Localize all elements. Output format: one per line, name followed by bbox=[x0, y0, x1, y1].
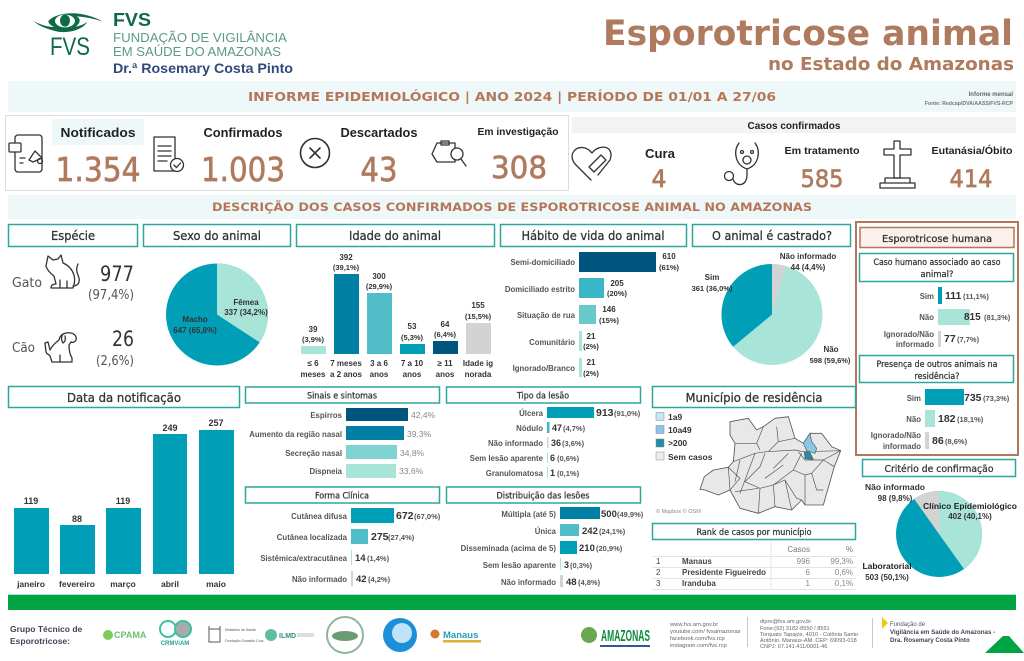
bar chart: tipo: Sem lesão aparente bbox=[470, 454, 544, 463]
bar chart: tipo: Granulomatosa bbox=[486, 469, 544, 478]
panel: totais de casos: Confirmados bbox=[204, 125, 282, 140]
bar chart: hábito: (61%) bbox=[659, 263, 680, 272]
footer: contatos: CNPJ: 07.141.411/0001-46 bbox=[760, 644, 827, 650]
title bbox=[603, 14, 1014, 75]
table: rank: Iranduba bbox=[682, 579, 716, 588]
bar chart: distribuição: (4,8%) bbox=[578, 578, 601, 587]
bar chart: distribuição: 500 bbox=[601, 509, 617, 520]
pie chart: critério: 402 (40,1%) bbox=[948, 512, 992, 521]
bar chart: forma: 275 bbox=[371, 531, 389, 543]
logo: Amazonas: AMAZONAS bbox=[601, 628, 650, 645]
bar chart: tipo: (91,0%) bbox=[614, 409, 641, 418]
bar chart: hábito: 610 bbox=[662, 252, 676, 261]
bar chart: forma: 42 bbox=[356, 574, 367, 585]
logo: Prefeitura de Manaus: Manaus bbox=[443, 630, 478, 641]
logo: FVS: FVS bbox=[50, 33, 90, 61]
bar chart: outros animais: (8,6%) bbox=[945, 437, 968, 446]
bar chart: forma: 14 bbox=[355, 553, 366, 564]
pie chart: sexo: 337 (34,2%) bbox=[224, 308, 268, 317]
panel: casos confirmados: Cura bbox=[645, 146, 676, 161]
legend: mapa: Sem casos bbox=[668, 452, 713, 462]
title: Esporotricose animal bbox=[603, 14, 1013, 54]
panel: idade do animal: Idade do animal bbox=[349, 228, 441, 243]
bar chart: hábito bbox=[505, 252, 680, 378]
panel: data da notificação: Data da notificação bbox=[67, 390, 181, 405]
bar chart: hábito: 21 bbox=[587, 332, 596, 341]
bar chart: tipo: 36 bbox=[551, 438, 561, 448]
bar chart: outros animais: Sim bbox=[907, 394, 921, 403]
band: informe epidemiológico: Fonte: Redcap/DVA/AASS/FVS-RCP bbox=[925, 101, 1014, 107]
table: rank: 3 bbox=[656, 579, 661, 588]
bar chart: hábito: 146 bbox=[602, 305, 616, 314]
icon: gato bbox=[46, 255, 79, 288]
bar chart: caso humano associado: 77 bbox=[944, 333, 956, 345]
table: rank: 0,1% bbox=[835, 579, 853, 588]
icon: eye bbox=[33, 13, 103, 32]
bar chart: forma bbox=[260, 508, 441, 586]
panel: forma clínica: Forma Clínica bbox=[315, 492, 369, 502]
bar chart: tipo: 47 bbox=[552, 423, 562, 433]
panel: castrado bbox=[692, 224, 851, 365]
bar chart: tipo: 1 bbox=[550, 468, 555, 478]
table: rank: 99,3% bbox=[830, 557, 853, 566]
panel: casos confirmados: Eutanásia/Óbito bbox=[932, 144, 1012, 157]
pie chart: critério: Não informado bbox=[865, 482, 925, 492]
panel: esporotricose humana: Caso humano associado ao caso bbox=[874, 258, 1000, 268]
bar chart: hábito: (20%) bbox=[607, 289, 628, 298]
logo: FVS: Dr.ª Rosemary Costa Pinto bbox=[113, 60, 293, 76]
bar chart: sinais: 33,6% bbox=[399, 466, 424, 476]
panel: totais de casos: Descartados bbox=[340, 125, 418, 140]
bar chart: notificações por mês: 257 bbox=[208, 418, 224, 428]
bar chart: sinais: Secreção nasal bbox=[285, 449, 342, 458]
bar chart: distribuição: Disseminada (acima de 5) bbox=[461, 544, 556, 553]
logo: selo circular bbox=[327, 617, 363, 653]
footer: contatos: Fone:(92) 3182-8550 / 8551 bbox=[760, 626, 830, 632]
panel: hábito de vida bbox=[500, 224, 686, 378]
bar chart: tipo: Úlcera bbox=[519, 409, 544, 418]
bar chart: distribuição: 210 bbox=[579, 543, 595, 554]
bar chart: idade: (29,9%) bbox=[366, 282, 393, 291]
bar chart: hábito: Situação de rua bbox=[517, 311, 576, 320]
panel: município de residência: Município de residência bbox=[686, 390, 822, 405]
panel: castrado: O animal é castrado? bbox=[712, 228, 832, 243]
panel: espécie: 977 bbox=[100, 262, 134, 286]
panel: esporotricose humana: Presença de outros animais na bbox=[876, 360, 998, 370]
panel: sinais e sintomas bbox=[246, 387, 440, 478]
panel: espécie: Cão bbox=[12, 341, 35, 356]
bar chart: forma: (1,4%) bbox=[367, 554, 390, 563]
panel: rank de casos bbox=[652, 524, 856, 590]
panel: espécie: 26 bbox=[112, 327, 134, 351]
bar chart: caso humano associado: (81,3%) bbox=[984, 313, 1011, 322]
panel: critério de confirmação bbox=[862, 460, 1017, 582]
bar chart: idade: anos bbox=[370, 370, 389, 379]
footer: contatos: dipre@fvs.am.gov.br bbox=[760, 619, 811, 625]
table: rank: 2 bbox=[656, 568, 661, 577]
panel: sexo do animal bbox=[144, 224, 290, 366]
panel: forma clínica bbox=[246, 487, 441, 586]
bar chart: tipo: (3,6%) bbox=[562, 439, 585, 448]
logo: CRMV: CRMViAM bbox=[161, 641, 189, 647]
logo: FVS: EM SAÚDE DO AMAZONAS bbox=[113, 44, 281, 59]
bar chart: sinais: Dispneia bbox=[310, 467, 343, 476]
bar chart: distribuição: 242 bbox=[582, 526, 598, 537]
panel: totais de casos: 308 bbox=[491, 151, 547, 186]
bar chart: idade: ≤ 6 bbox=[307, 359, 319, 368]
band: descrição dos casos bbox=[8, 195, 1016, 219]
footer: contatos: youtube.com/ fvsamazonas bbox=[670, 629, 741, 635]
bar chart: idade: Idade ig bbox=[463, 359, 493, 368]
panel: espécie: Espécie bbox=[51, 228, 95, 243]
logo: Ministério da Saúde bbox=[209, 626, 264, 643]
bar chart: notificações por mês bbox=[14, 418, 234, 589]
bar chart: caso humano associado: Sim bbox=[920, 292, 934, 301]
footer: contatos: instagram.com/fvs.rcp bbox=[670, 643, 727, 649]
bar chart: forma: Não informado bbox=[292, 575, 347, 584]
panel: município de residência: © Mapbox © OSM bbox=[656, 508, 701, 515]
bar chart: sinais: 39,3% bbox=[407, 429, 432, 439]
panel: espécie: (97,4%) bbox=[88, 287, 134, 303]
bar chart: sinais: 34,8% bbox=[400, 448, 425, 458]
bar chart: idade: 7 meses bbox=[330, 359, 362, 368]
table: rank: 1 bbox=[806, 579, 811, 588]
pie chart: castrado: Não bbox=[823, 345, 839, 354]
icon: cão bbox=[45, 333, 76, 362]
panel: município de residência bbox=[652, 386, 856, 515]
pie chart: sexo bbox=[166, 264, 268, 366]
bar chart: idade: ≥ 11 bbox=[437, 359, 453, 368]
bar chart: idade: norada bbox=[465, 370, 492, 379]
footer: fundação bbox=[882, 617, 1024, 653]
footer: contatos bbox=[669, 617, 873, 650]
bar chart: caso humano associado: Ignorado/Não bbox=[884, 330, 934, 339]
table: rank: 6 bbox=[806, 568, 811, 577]
bar chart: idade bbox=[301, 253, 493, 379]
table: rank: Manaus bbox=[682, 557, 712, 566]
panel: casos confirmados: Casos confirmados bbox=[748, 120, 841, 132]
bar chart: idade: (3,9%) bbox=[302, 335, 325, 344]
icon: notificação bbox=[9, 135, 42, 172]
bar chart: hábito: Semi-domiciliado bbox=[510, 258, 575, 267]
panel: distribuição das lesões bbox=[446, 487, 644, 588]
table: rank bbox=[652, 542, 856, 590]
title: no Estado do Amazonas bbox=[768, 55, 1014, 75]
footer: contatos: www.fvs.am.gov.br bbox=[669, 622, 718, 628]
bar chart: idade: 3 a 6 bbox=[370, 359, 388, 368]
bar chart: idade: 300 bbox=[372, 272, 386, 281]
bar chart: distribuição: (49,9%) bbox=[617, 510, 644, 519]
band: informe epidemiológico: Informe mensal bbox=[969, 92, 1013, 98]
panel: esporotricose humana: Esporotricose humana bbox=[882, 234, 992, 245]
bar chart: forma: Sistêmica/extracutânea bbox=[260, 554, 348, 563]
logo: ILMD bbox=[265, 629, 314, 641]
panel: sinais e sintomas: Sinais e sintomas bbox=[307, 392, 378, 402]
logo: selo azul bbox=[383, 618, 417, 652]
panel: sexo do animal: Sexo do animal bbox=[173, 228, 261, 243]
bar chart: notificações por mês: 88 bbox=[72, 514, 82, 524]
panel: distribuição das lesões: Distribuição das lesões bbox=[496, 492, 590, 502]
logo: Amazonas bbox=[581, 627, 650, 647]
pie chart: castrado: 44 (4,4%) bbox=[791, 263, 826, 272]
bar chart: caso humano associado: 815 bbox=[964, 312, 981, 323]
bar chart: forma: 672 bbox=[396, 510, 414, 522]
pie chart: sexo: Fêmea bbox=[233, 298, 259, 307]
bar chart: notificações por mês: abril bbox=[161, 579, 179, 589]
footer: fundação: Vigilância em Saúde do Amazonas - bbox=[890, 629, 995, 636]
pie chart: castrado: 598 (59,6%) bbox=[810, 356, 851, 365]
pie chart: sexo: Macho bbox=[182, 315, 208, 324]
bar chart: distribuição: Não informado bbox=[501, 578, 556, 587]
footer: grupo técnico bbox=[10, 624, 83, 646]
logo: Ministério da Saúde: Fundação Oswaldo Cruz bbox=[225, 639, 264, 643]
legend: mapa: >200 bbox=[668, 438, 687, 448]
panel: esporotricose humana: animal? bbox=[920, 270, 954, 280]
icon: coração com curativo bbox=[572, 147, 611, 180]
logo: Ministério da Saúde: Ministério da Saúde bbox=[225, 628, 256, 632]
bar chart: tipo: (4,7%) bbox=[563, 424, 586, 433]
pie chart: critério bbox=[862, 482, 1017, 582]
bar chart: tipo: Nódulo bbox=[516, 424, 543, 433]
bar chart: idade: 64 bbox=[441, 320, 450, 329]
pie chart: critério: 503 (50,1%) bbox=[865, 573, 909, 582]
band: informe epidemiológico: INFORME EPIDEMIOLÓGICO | ANO 2024 | PERÍODO DE 01/01 A 27/06 bbox=[248, 89, 776, 104]
panel: data da notificação bbox=[8, 386, 240, 589]
band: informe epidemiológico bbox=[8, 81, 1016, 112]
panel: totais de casos: 43 bbox=[360, 150, 398, 189]
panel: rank de casos: Rank de casos por município bbox=[696, 528, 812, 538]
bar chart: outros animais: (73,3%) bbox=[983, 394, 1010, 403]
bar chart: idade: 7 a 10 bbox=[401, 359, 424, 368]
bar chart: hábito: 21 bbox=[587, 358, 596, 367]
logo: ILMD: ILMD bbox=[279, 633, 296, 640]
icon: investigação bbox=[432, 141, 466, 166]
panel: critério de confirmação: Critério de confirmação bbox=[884, 463, 994, 475]
panel: casos confirmados: 585 bbox=[800, 165, 844, 193]
bar chart: outros animais: Ignorado/Não bbox=[871, 431, 921, 440]
panel: hábito de vida: Hábito de vida do animal bbox=[522, 228, 664, 243]
bar chart: idade: 392 bbox=[339, 253, 353, 262]
bar chart: notificações por mês: março bbox=[110, 579, 136, 589]
table: rank: 996 bbox=[797, 557, 811, 566]
bar chart: distribuição: (20,9%) bbox=[596, 544, 623, 553]
bar chart: distribuição: Única bbox=[535, 527, 557, 536]
table: rank: 1 bbox=[656, 557, 661, 566]
bar chart: distribuição: Múltipla (até 5) bbox=[501, 510, 556, 519]
bar chart: distribuição bbox=[461, 507, 644, 588]
panel: casos confirmados: 414 bbox=[950, 165, 992, 193]
pie chart: castrado: Sim bbox=[705, 273, 719, 282]
table: rank: Casos bbox=[787, 545, 810, 554]
panel: tipo da lesão: Tipo da lesão bbox=[516, 392, 569, 402]
bar chart: notificações por mês: janeiro bbox=[16, 579, 45, 589]
footer: grupo técnico: Grupo Técnico de bbox=[10, 624, 83, 634]
bar chart: idade: a 2 anos bbox=[330, 370, 363, 379]
bar chart: notificações por mês: maio bbox=[206, 579, 226, 589]
bar chart: notificações por mês: 119 bbox=[24, 496, 38, 506]
footer: contatos: Antônio. Manaus-AM. CEP: 69093-018 bbox=[760, 638, 857, 644]
logo: FVS: FVS bbox=[113, 10, 151, 30]
bar chart: outros animais bbox=[871, 389, 1010, 451]
panel: espécie: (2,6%) bbox=[96, 353, 134, 369]
icon: cruz bbox=[880, 141, 915, 188]
panel: esporotricose humana bbox=[856, 222, 1018, 455]
bar chart: forma: (67,0%) bbox=[414, 512, 441, 521]
legend: mapa: 1a9 bbox=[668, 412, 682, 422]
footer band bbox=[8, 594, 1016, 610]
bar chart: hábito: 205 bbox=[610, 279, 624, 288]
panel: totais de casos: Notificados bbox=[60, 125, 136, 140]
bar chart: outros animais: 735 bbox=[964, 392, 982, 404]
bar chart: tipo: 6 bbox=[550, 453, 555, 463]
logo: FVS: FUNDAÇÃO DE VIGILÂNCIA bbox=[113, 30, 287, 45]
table: rank: 0,6% bbox=[835, 568, 853, 577]
logo: Prefeitura de Manaus bbox=[430, 630, 481, 642]
bar chart: outros animais: informado bbox=[883, 442, 921, 451]
bar chart: idade: 155 bbox=[471, 301, 485, 310]
logo: FVS bbox=[33, 10, 293, 76]
footer: logos parceiros bbox=[103, 617, 650, 653]
bar chart: sinais: Aumento da região nasal bbox=[249, 430, 342, 439]
panel: espécie bbox=[8, 224, 138, 369]
bar chart: forma: (4,2%) bbox=[368, 575, 391, 584]
bar chart: idade: anos bbox=[403, 370, 422, 379]
footer: contatos: facebook.com/fvs.rcp bbox=[670, 636, 725, 642]
band: descrição dos casos: DESCRIÇÃO DOS CASOS CONFIRMADOS DE ESPOROTRICOSE ANIMAL NO AMAZONAS bbox=[212, 199, 812, 214]
bar chart: distribuição: (24,1%) bbox=[599, 527, 626, 536]
icon: documento confirmado bbox=[154, 137, 184, 172]
table: rank: % bbox=[846, 545, 853, 554]
bar chart: forma: Cutânea localizada bbox=[277, 533, 348, 542]
bar chart: sinais: 42,4% bbox=[411, 410, 436, 420]
bar chart: hábito: Ignorado/Branco bbox=[513, 364, 575, 373]
bar chart: tipo: (0,6%) bbox=[557, 454, 580, 463]
bar chart: idade: (5,3%) bbox=[401, 333, 424, 342]
pie chart: sexo: 647 (65,8%) bbox=[173, 326, 217, 335]
bar chart: tipo: (0,1%) bbox=[557, 469, 580, 478]
legend: mapa: 10a49 bbox=[668, 425, 692, 435]
footer: contatos: Torquato Tapajós, 4010 - Colônia Santo bbox=[760, 632, 858, 638]
bar chart: idade: (15,5%) bbox=[465, 312, 492, 321]
bar chart: forma: (27,4%) bbox=[388, 533, 415, 542]
logo: CPAMA: CPAMA bbox=[114, 630, 147, 640]
bar chart: sinais bbox=[249, 408, 436, 478]
bar chart: idade: (6,4%) bbox=[434, 330, 457, 339]
bar chart: hábito: Domiciliado estrito bbox=[505, 285, 575, 294]
panel: casos confirmados: Em tratamento bbox=[784, 145, 860, 157]
bar chart: hábito: (2%) bbox=[583, 369, 599, 378]
panel: esporotricose humana: residência? bbox=[914, 371, 960, 382]
bar chart: idade: meses bbox=[301, 370, 326, 379]
bar chart: outros animais: 86 bbox=[932, 435, 944, 447]
bar chart: caso humano associado: (7,7%) bbox=[957, 335, 980, 344]
bar chart: caso humano associado: (11,1%) bbox=[963, 292, 989, 301]
pie chart: castrado: 361 (36,0%) bbox=[692, 284, 733, 293]
icon: descartado bbox=[300, 138, 330, 168]
panel: tipo da lesão bbox=[446, 387, 641, 478]
icon: estetoscópio com pata bbox=[724, 143, 758, 185]
footer: fundação: Fundação de bbox=[890, 622, 926, 628]
bar chart: idade: anos bbox=[436, 370, 455, 379]
bar chart: caso humano associado: Não bbox=[919, 313, 934, 322]
panel: totais de casos: 1.003 bbox=[201, 150, 285, 189]
pie chart: critério: 98 (9,8%) bbox=[878, 494, 913, 503]
bar chart: idade: 53 bbox=[408, 322, 417, 331]
bar chart: forma: Cutânea difusa bbox=[291, 512, 348, 521]
bar chart: outros animais: (18,1%) bbox=[957, 415, 984, 424]
bar chart: hábito: Comunitário bbox=[529, 338, 575, 347]
bar chart: notificações por mês: fevereiro bbox=[59, 579, 95, 589]
legend: mapa bbox=[656, 412, 713, 462]
bar chart: caso humano associado: 111 bbox=[945, 290, 962, 302]
bar chart: outros animais: 182 bbox=[938, 413, 956, 425]
bar chart: outros animais: Não bbox=[906, 415, 921, 424]
panel: casos confirmados bbox=[572, 117, 1016, 193]
panel: espécie: Gato bbox=[12, 276, 42, 291]
table: rank: Presidente Figueiredo bbox=[682, 568, 766, 577]
bar chart: distribuição: 3 bbox=[564, 560, 569, 570]
panel: idade do animal bbox=[296, 224, 494, 379]
bar chart: notificações por mês: 119 bbox=[116, 496, 130, 506]
pie chart: critério: Laboratorial bbox=[862, 561, 912, 571]
bar chart: distribuição: Sem lesão aparente bbox=[483, 561, 557, 570]
bar chart: hábito: (15%) bbox=[599, 316, 620, 325]
footer: grupo técnico: Esporotricose: bbox=[10, 636, 70, 646]
logo: CRMV bbox=[160, 621, 191, 647]
bar chart: idade: 39 bbox=[309, 325, 318, 334]
bar chart: tipo: Não informado bbox=[488, 439, 543, 448]
bar chart: caso humano associado: informado bbox=[896, 340, 934, 349]
panel: totais de casos bbox=[6, 116, 568, 190]
footer: fundação: Dra. Rosemary Costa Pinto bbox=[890, 637, 970, 644]
bar chart: hábito: (2%) bbox=[583, 342, 599, 351]
panel: totais de casos: Em investigação bbox=[478, 126, 558, 138]
bar chart: distribuição: 48 bbox=[566, 577, 577, 588]
pie chart: castrado bbox=[692, 252, 851, 365]
pie chart: critério: Clínico Epidemiológico bbox=[923, 501, 1017, 511]
bar chart: sinais: Espirros bbox=[310, 411, 343, 420]
bar chart: idade: (39,1%) bbox=[333, 263, 360, 272]
map: Amazonas bbox=[700, 417, 841, 513]
bar chart: tipo bbox=[470, 407, 641, 478]
bar chart: distribuição: (0,3%) bbox=[570, 561, 593, 570]
bar chart: caso humano associado bbox=[884, 287, 1011, 349]
pie chart: castrado: Não informado bbox=[780, 252, 836, 261]
panel: totais de casos: 1.354 bbox=[56, 150, 140, 189]
bar chart: notificações por mês: 249 bbox=[162, 423, 178, 433]
panel: casos confirmados: 4 bbox=[652, 165, 666, 193]
bar chart: tipo: 913 bbox=[596, 407, 614, 419]
